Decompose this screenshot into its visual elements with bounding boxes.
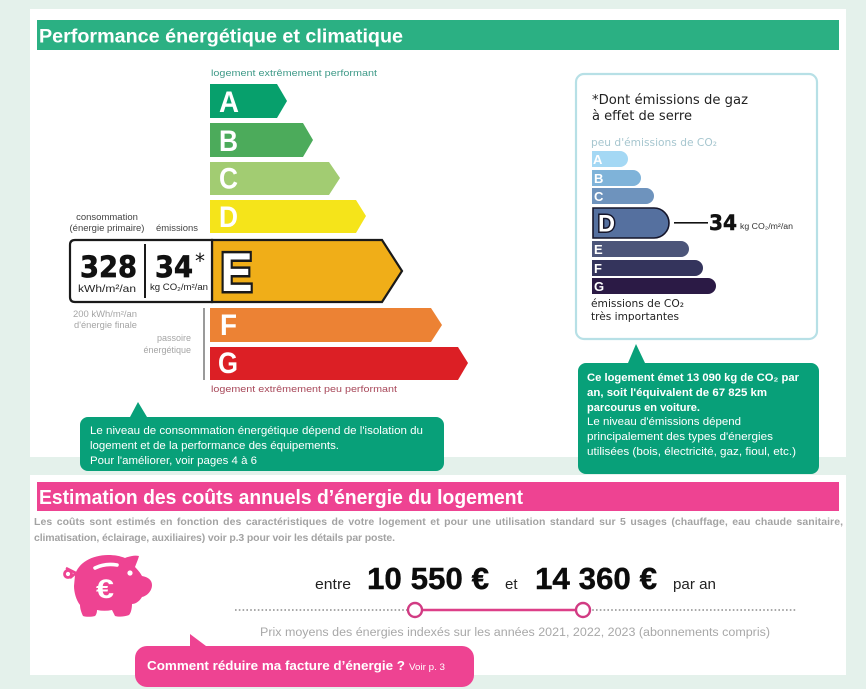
- current rating: class E with values: kWh/m²/an: [78, 283, 136, 295]
- CO2 class D current: D: [598, 210, 615, 238]
- cost range: 10 550 €: [367, 561, 489, 596]
- current rating: class E with values: *: [195, 249, 205, 273]
- consumption labels: passoire: [157, 333, 191, 343]
- panel: émissions de gaz à effet de serre: très importantes: [591, 311, 679, 323]
- cost range: 14 360 €: [535, 561, 657, 596]
- heading: performance énergétique et climatique: [37, 20, 839, 50]
- range slider: [235, 603, 796, 617]
- CO2 class F: [592, 260, 703, 276]
- energy scale: logement extrêmement performant: [211, 68, 377, 79]
- panel: émissions de gaz à effet de serre: *Dont émissions de gaz: [592, 93, 748, 108]
- text: prix moyens: Prix moyens des énergies indexés sur les années 2021, 2022, 2023 (abonnements compris): [260, 627, 770, 639]
- class D: [210, 200, 366, 234]
- panel: performance énergétique: [30, 9, 846, 457]
- CO2 class C: C: [594, 189, 604, 204]
- class B: [210, 123, 313, 158]
- callout: émissions équivalent voiture: Le niveau d'émissions dépend: [587, 416, 741, 428]
- CO2 class G: [592, 278, 716, 294]
- callout: réduire la facture: Voir p. 3: [409, 662, 445, 672]
- class C: [210, 162, 340, 196]
- CO2 class A: A: [593, 152, 603, 167]
- callout: réduire la facture: Comment réduire ma facture d’énergie ?: [147, 658, 405, 673]
- callout: émissions équivalent voiture: principalement des types d'énergies: [587, 431, 774, 443]
- energy scale: logement extrêmement peu performant: [211, 384, 397, 395]
- icon: piggy bank: €: [96, 574, 114, 604]
- callout: émissions équivalent voiture: Ce logement émet 13 090 kg de CO₂ par: [587, 372, 800, 384]
- CO2 class D current: [593, 208, 669, 238]
- callout: niveau de consommation: Pour l'améliorer, voir pages 4 à 6: [90, 455, 257, 467]
- consumption labels: (énergie primaire): [70, 223, 144, 234]
- callout: émissions équivalent voiture: an, soit l'équivalent de 67 825 km: [587, 387, 767, 399]
- callout: émissions équivalent voiture: [578, 344, 819, 474]
- class G: [210, 347, 468, 380]
- icon: piggy bank: [64, 555, 152, 617]
- panel: émissions de gaz à effet de serre: émissions de CO₂: [591, 298, 684, 310]
- CO2 class E: E: [594, 242, 603, 257]
- current rating: class E with values: E: [220, 241, 252, 303]
- CO2 class B: B: [594, 171, 603, 186]
- consumption labels: [70, 212, 199, 355]
- consumption labels: d'énergie finale: [74, 320, 137, 330]
- CO2 class B: [592, 170, 641, 186]
- cost range: et: [505, 576, 518, 593]
- current rating: class E with values: kg CO₂/m²/an: [150, 282, 208, 292]
- CO2 class F: F: [594, 261, 602, 276]
- CO2 class C: [592, 188, 654, 204]
- CO2 class E: [592, 241, 689, 257]
- panel: estimation des coûts: [30, 475, 846, 675]
- callout: niveau de consommation: Le niveau de consommation énergétique dépend de l'isolation du: [90, 425, 423, 437]
- class G: G: [218, 347, 238, 380]
- text: méthode d'estimation: Les coûts sont estimés en fonction des caractéristiques de votre logement et pour une utilisation standard sur 5 usages (chauffage, eau chaude sanitaire,: [34, 516, 843, 528]
- panel: émissions de gaz à effet de serre: à effet de serre: [592, 109, 692, 124]
- current rating: class E with values: [70, 240, 402, 303]
- consumption labels: émissions: [156, 223, 199, 233]
- cost range: [315, 561, 716, 596]
- callout: émissions équivalent voiture: utilisées (bois, électricité, gaz, fioul, etc.): [587, 446, 796, 458]
- panel: émissions de gaz à effet de serre: kg CO₂/m²/an: [740, 222, 793, 231]
- current rating: class E with values: 34: [155, 250, 193, 284]
- heading: estimation des coûts: [37, 482, 839, 511]
- class A: A: [219, 86, 239, 119]
- cost range: entre: [315, 576, 351, 593]
- callout: réduire la facture: [135, 634, 474, 687]
- heading: estimation des coûts: Estimation des coûts annuels d’énergie du logement: [39, 487, 523, 509]
- CO2 class G: G: [594, 279, 604, 294]
- class B: B: [219, 125, 238, 158]
- consumption labels: énergétique: [143, 345, 191, 355]
- panel: émissions de gaz à effet de serre: 34: [709, 211, 737, 235]
- cost range: par an: [673, 576, 716, 593]
- panel: émissions de gaz à effet de serre: [576, 74, 817, 339]
- callout: niveau de consommation: [80, 402, 444, 471]
- callout: niveau de consommation: logement et de la performance des équipements.: [90, 440, 339, 452]
- panel: émissions de gaz à effet de serre: peu d'émissions de CO₂: [591, 137, 717, 149]
- CO2 class A: [592, 151, 628, 167]
- class D: D: [219, 201, 238, 234]
- class F: [210, 308, 442, 342]
- heading: performance énergétique et climatique: Performance énergétique et climatique: [39, 26, 403, 48]
- current rating: class E with values: 328: [80, 250, 137, 284]
- class F: F: [220, 309, 237, 342]
- text: méthode d'estimation: [34, 516, 843, 544]
- consumption labels: consommation: [76, 212, 138, 223]
- energy scale: [203, 68, 468, 395]
- callout: émissions équivalent voiture: parcourus en voiture.: [587, 402, 700, 414]
- consumption labels: 200 kWh/m²/an: [73, 309, 137, 319]
- class C: C: [219, 162, 238, 196]
- class A: [210, 84, 287, 119]
- text: méthode d'estimation: climatisation, éclairage, auxiliaires) voir p.3 pour voir les détails par poste.: [34, 532, 395, 544]
